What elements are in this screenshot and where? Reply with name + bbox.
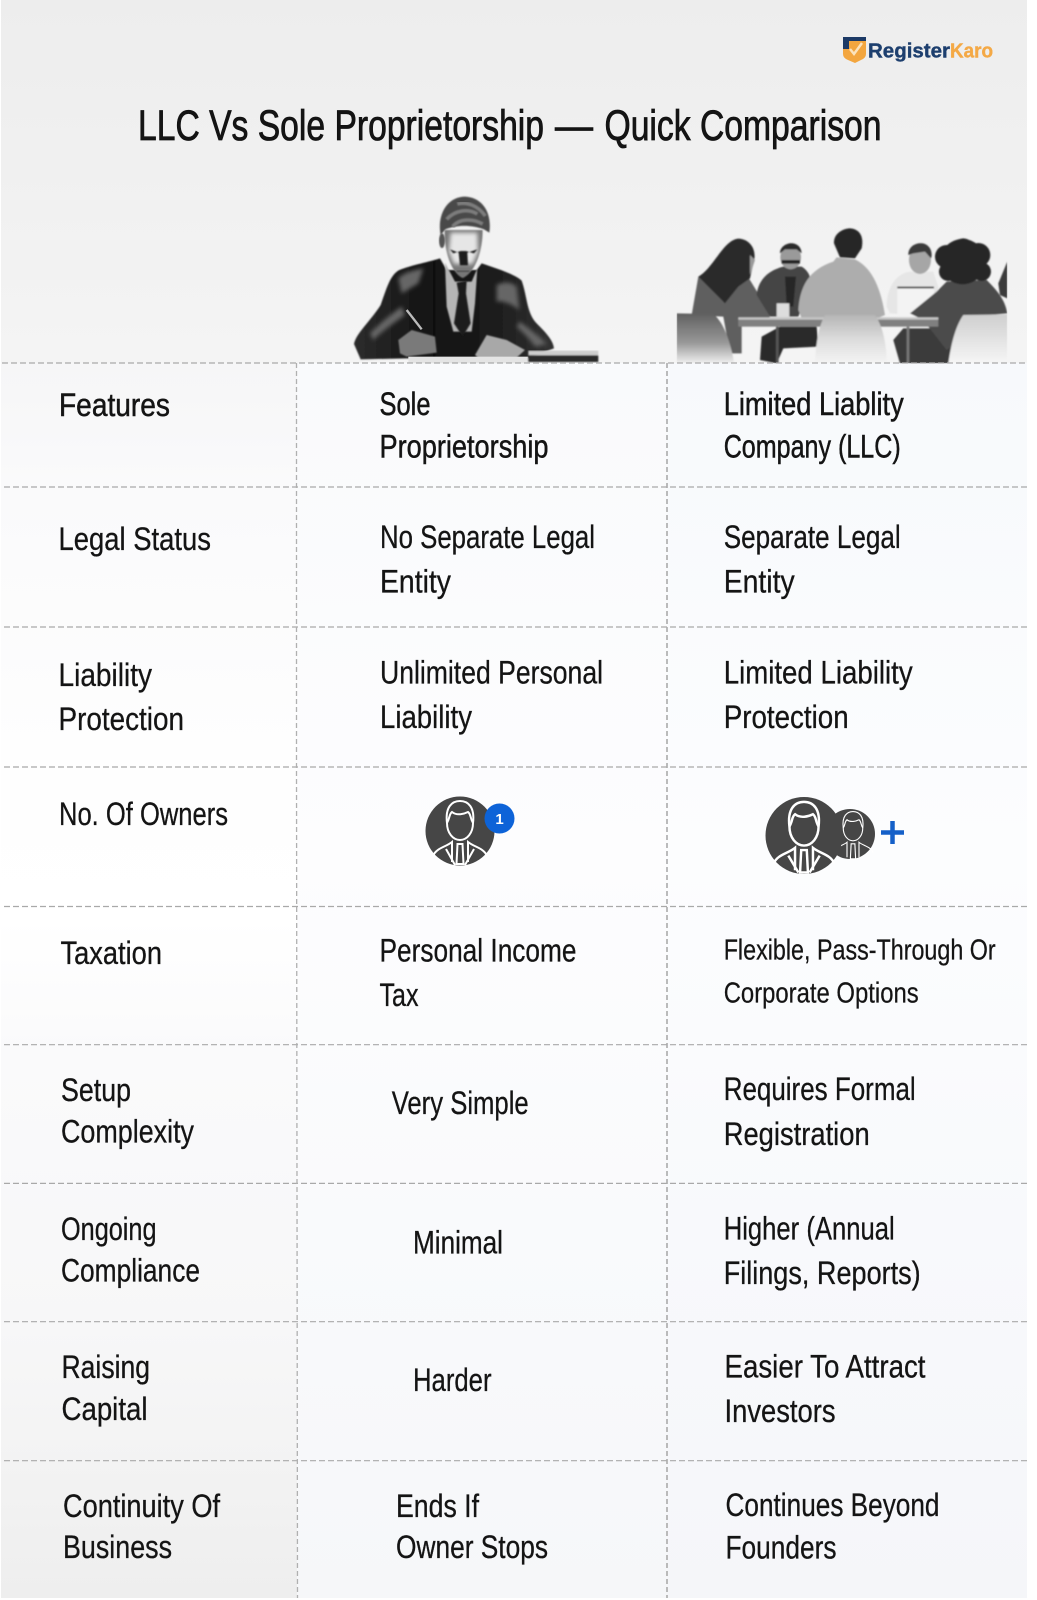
- LLC value: Separate Legal: [724, 519, 901, 555]
- row: raising capital: [62, 1348, 926, 1429]
- icon: plus: [881, 821, 904, 844]
- LLC value: [724, 654, 913, 735]
- man with glasses body: [757, 267, 811, 317]
- forehead and cheek highlight: [449, 233, 478, 264]
- face: [445, 230, 483, 278]
- label: Setup: [61, 1072, 131, 1108]
- cup: [777, 303, 789, 317]
- sole proprietorship value: Ends If: [396, 1488, 480, 1524]
- shirt: [445, 263, 477, 332]
- sole proprietorship column heading: Proprietorship: [380, 428, 548, 464]
- label: Liability: [58, 657, 153, 693]
- sole proprietorship value: Unlimited Personal: [380, 654, 603, 690]
- sole proprietorship value: Owner Stops: [396, 1529, 548, 1565]
- tie: [454, 281, 471, 337]
- sole proprietorship value: Harder: [413, 1362, 492, 1398]
- curly hair: [935, 238, 991, 284]
- badge: 1: 1: [495, 811, 504, 828]
- sole proprietorship column heading: [380, 386, 548, 464]
- ear: [439, 233, 445, 248]
- LLC value: Limited Liability: [724, 654, 913, 690]
- man suit: [354, 258, 554, 359]
- row: taxation: [60, 933, 996, 1013]
- label: [61, 1211, 200, 1288]
- logo: RegisterKaro: [843, 37, 993, 63]
- sole proprietorship value: Very Simple: [392, 1085, 529, 1121]
- hair: [440, 197, 490, 235]
- LLC value: [724, 1348, 926, 1429]
- label: [62, 1349, 150, 1427]
- label: Business: [63, 1529, 172, 1565]
- icon: multiple owners with plus: [766, 797, 904, 874]
- logo wordmark: [868, 40, 993, 62]
- table legs: [776, 327, 779, 363]
- row: continuity of business: [63, 1487, 940, 1566]
- hair strands: [447, 203, 485, 227]
- LLC column heading: Limited Liablity: [724, 386, 904, 422]
- book: [528, 351, 598, 362]
- woman cheek: [750, 255, 755, 275]
- table grid lines: [2, 363, 1027, 1598]
- LLC value: Registration: [724, 1116, 870, 1152]
- label: Legal Status: [58, 521, 211, 557]
- LLC value: Protection: [724, 699, 849, 735]
- row: liability protection: [58, 654, 913, 737]
- LLC column heading: Company (LLC): [724, 428, 901, 464]
- label: Complexity: [61, 1114, 195, 1150]
- man head: [780, 245, 801, 269]
- LLC value: [726, 1487, 940, 1566]
- right chair: [948, 314, 1007, 363]
- label: [61, 1072, 195, 1150]
- sole proprietorship value: Personal Income: [380, 933, 576, 969]
- label: [58, 657, 184, 737]
- sole proprietorship value: [380, 519, 595, 600]
- person: back legs: [760, 327, 818, 363]
- label: Capital: [62, 1391, 148, 1427]
- pen: [407, 310, 422, 329]
- title: Quick Comparison: [604, 102, 882, 150]
- LLC value: Filings, Reports): [724, 1255, 921, 1291]
- person: right legs: [893, 328, 957, 363]
- sole proprietorship value: [380, 654, 603, 735]
- LLC value: Requires Formal: [724, 1071, 916, 1107]
- centre man shirt: [798, 257, 885, 320]
- label: Protection: [58, 701, 184, 737]
- label: Ongoing: [61, 1211, 156, 1247]
- person: woman left body: [692, 277, 770, 353]
- laptop: [897, 288, 934, 318]
- resting hand: [475, 335, 525, 359]
- feature column heading: Features: [59, 387, 170, 423]
- LLC value: [724, 934, 996, 1010]
- photo: team meeting around a table: [677, 228, 1007, 363]
- writing hand: [398, 330, 437, 357]
- centre chair: [815, 319, 886, 354]
- LLC value: Easier To Attract: [724, 1348, 926, 1384]
- left chair: [677, 313, 734, 363]
- woman hair: [698, 239, 755, 303]
- row: legal status: [58, 519, 901, 600]
- label: [63, 1488, 221, 1565]
- row: ongoing compliance: [61, 1211, 921, 1291]
- row: number of owners: [59, 796, 904, 874]
- logo wordmark: Register: [868, 40, 950, 62]
- LLC value: Continues Beyond: [726, 1487, 940, 1523]
- curly-haired woman body: [910, 280, 1007, 350]
- label: No. Of Owners: [59, 796, 228, 832]
- LLC value: [724, 1071, 916, 1152]
- white-shirt woman: [887, 272, 938, 317]
- LLC value: Founders: [726, 1530, 836, 1566]
- LLC column heading: [724, 386, 904, 464]
- sole proprietorship value: Minimal: [413, 1225, 503, 1261]
- icon: shield: [843, 37, 866, 63]
- sleeve and shoulder shading: [370, 268, 547, 347]
- right edge person: [998, 262, 1007, 298]
- eyes and nose shadow: [450, 249, 477, 265]
- mouth shadow: [457, 270, 469, 272]
- sole proprietorship column heading: Sole: [380, 386, 430, 422]
- LLC value: [724, 519, 901, 600]
- LLC value: Corporate Options: [724, 978, 919, 1010]
- title: [138, 102, 882, 150]
- label: Compliance: [61, 1252, 200, 1288]
- sole proprietorship value: Tax: [380, 977, 418, 1013]
- label: Continuity Of: [63, 1488, 221, 1524]
- sole proprietorship value: No Separate Legal: [380, 519, 595, 555]
- sole proprietorship value: [396, 1488, 548, 1565]
- icon: single owner with badge: [426, 796, 514, 866]
- centre man head: [834, 228, 862, 258]
- logo wordmark: Karo: [950, 40, 993, 62]
- row: setup complexity: [61, 1071, 916, 1152]
- sole proprietorship value: Entity: [380, 564, 452, 600]
- row: header: [59, 386, 904, 464]
- label: Raising: [62, 1349, 150, 1385]
- label: Taxation: [60, 935, 162, 971]
- sole proprietorship value: [380, 933, 576, 1013]
- LLC value: Investors: [724, 1393, 836, 1429]
- paper: [408, 357, 528, 363]
- LLC value: Higher (Annual: [724, 1211, 895, 1247]
- LLC value: [724, 1211, 921, 1291]
- title: LLC Vs Sole Proprietorship: [138, 102, 544, 150]
- sole proprietorship value: Liability: [380, 699, 473, 735]
- title: —: [555, 102, 593, 150]
- table: [738, 319, 938, 327]
- photo: solo businessman writing at desk: [354, 197, 598, 363]
- shirt and tie: [785, 277, 796, 307]
- LLC value: Entity: [724, 564, 795, 600]
